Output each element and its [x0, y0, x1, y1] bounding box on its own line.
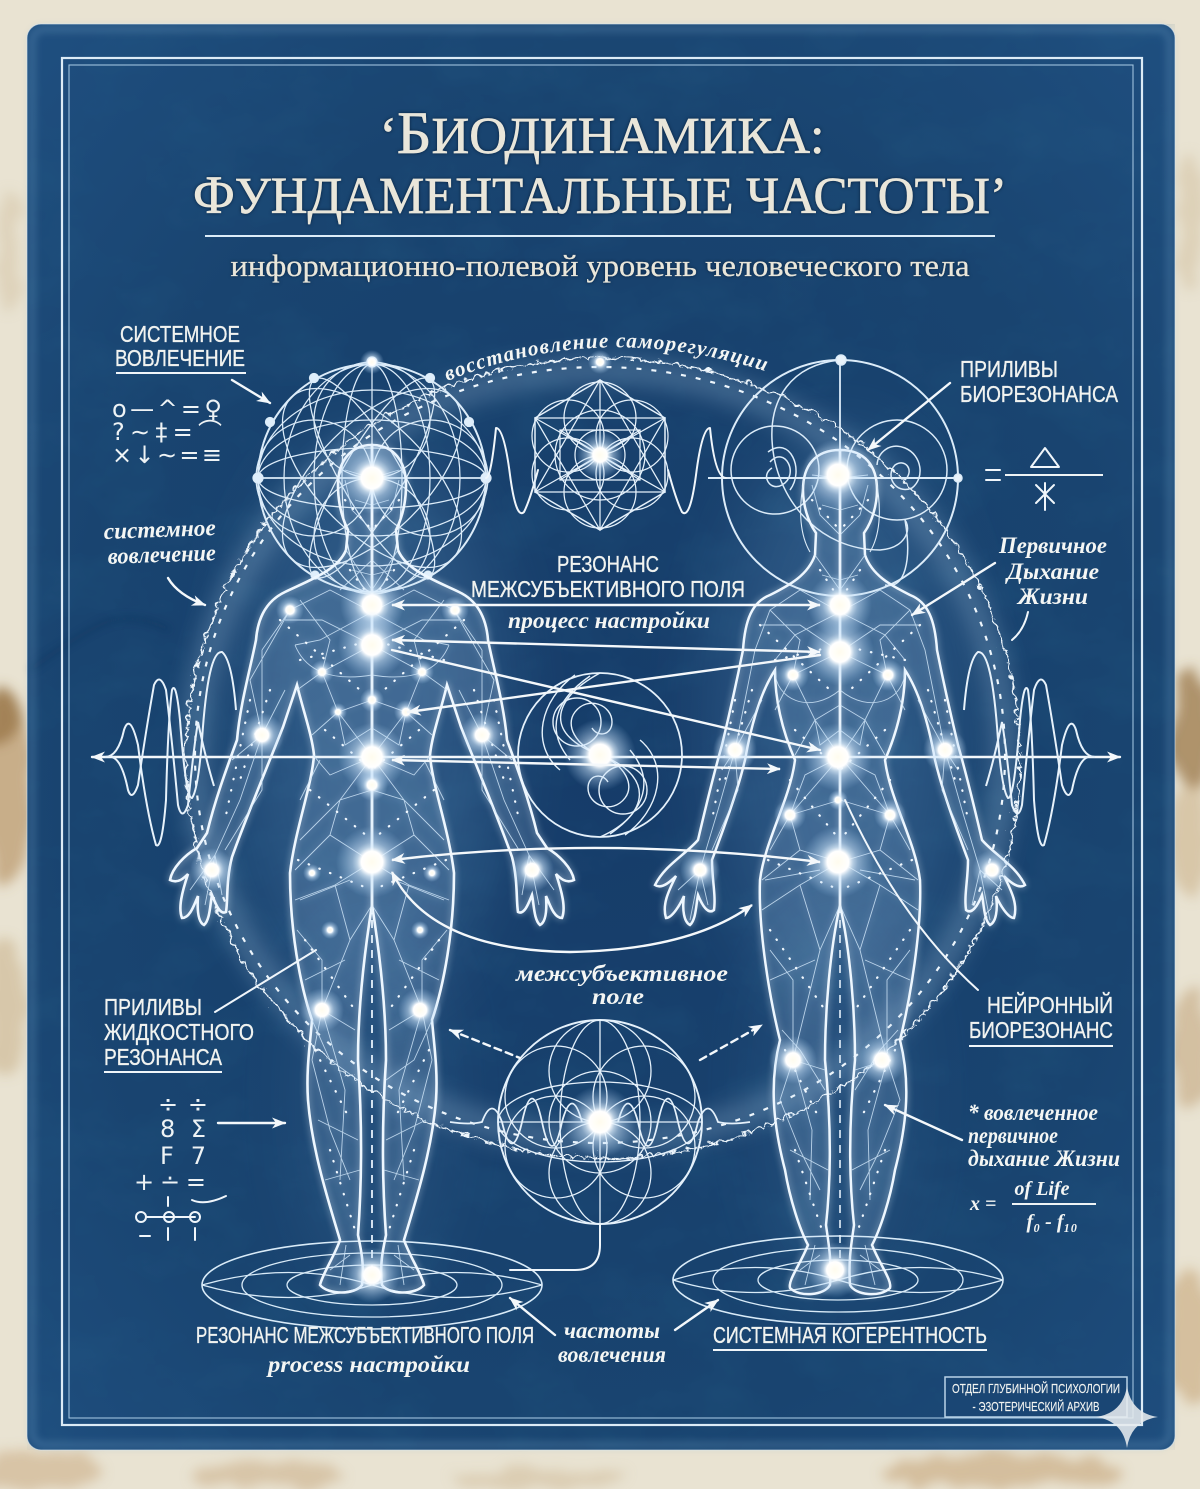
- central horizontal axis with wave packets: [92, 652, 1120, 845]
- handwritten: system involvement: [103, 515, 216, 569]
- male figure: [170, 445, 574, 1292]
- arrow to left sphere: [232, 380, 270, 403]
- subtitle: информационно-полевой уровень человеческого тела: [230, 248, 970, 283]
- symbols lower-left: [134, 1090, 226, 1240]
- bottom flower of life: [450, 1020, 750, 1224]
- label: tides of bioresonance: ПРИЛИВЫ: [960, 356, 1058, 382]
- handwritten: involved primary breath of life: [968, 1100, 1120, 1171]
- big field circle: [183, 355, 1017, 1155]
- handwritten: involvement frequencies: [558, 1318, 666, 1367]
- ground discs: [202, 1236, 1003, 1329]
- handwritten: process tuning: process настройки: [266, 1352, 470, 1377]
- label: fluid resonance tides: ПРИЛИВЫ: [104, 994, 202, 1020]
- handwritten: intersubjective field: поле: [592, 984, 644, 1009]
- label: neural bioresonance: [969, 991, 1113, 1046]
- label: fluid resonance tides: РЕЗОНАНСА: [104, 1044, 223, 1070]
- label: bottom-left resonance: РЕЗОНАНС МЕЖСУБЪЕКТИВНОГО ПОЛЯ: [196, 1322, 534, 1348]
- formula lower-right: x =: [969, 1193, 996, 1215]
- title: ФУНДАМЕНТАЛЬНЫЕ ЧАСТОТЫ’: [193, 165, 1007, 225]
- symbols lower-left: ÷ ÷: [158, 1090, 208, 1118]
- label: tides of bioresonance: [960, 356, 1119, 407]
- label: system involvement top-left: СИСТЕМНОЕ: [120, 321, 240, 347]
- arrow to female shoulder: [912, 563, 995, 615]
- symbols top-left: ? ∼ ‡ = ⌒: [112, 418, 222, 446]
- symbols lower-left: + ∸ =: [134, 1168, 206, 1196]
- formula top-right: [986, 448, 1103, 510]
- arrow to male leg: [218, 1122, 285, 1124]
- circular label: restoration of self-regulation: восстановление саморегуляции: [446, 337, 768, 380]
- handwritten: primary breath of life: Дыхание: [1005, 559, 1099, 584]
- symbols top-left: × ↓ ∼ = ≡: [112, 441, 222, 469]
- archive stamp: - ЭЗОТЕРИЧЕСКИЙ АРХИВ: [972, 1399, 1100, 1414]
- label: tides of bioresonance: БИОРЕЗОНАНСА: [960, 381, 1119, 407]
- title: ‘БИОДИНАМИКА:: [380, 100, 824, 166]
- handwritten: tuning process: процесс настройки: [508, 608, 710, 633]
- handwritten: involvement frequencies: частоты: [564, 1318, 660, 1343]
- handwritten: intersubjective field: [515, 961, 728, 1009]
- title rule: [205, 235, 995, 237]
- yin-yang spiral: [518, 673, 682, 837]
- formula lower-right: [969, 1178, 1096, 1233]
- sine wave: top: [486, 428, 726, 513]
- arrow to right sphere: [868, 383, 950, 450]
- sphere: right golden spiral: [708, 355, 962, 596]
- pointer to male thigh: [215, 950, 316, 1012]
- label: intersubjective field resonance: РЕЗОНАНС: [557, 551, 659, 577]
- sparkle mark: [1096, 1386, 1158, 1448]
- arrow to female knee: [885, 1105, 962, 1140]
- handwritten: system involvement: системное: [103, 515, 216, 544]
- handwritten: primary breath of life: Первичное: [998, 533, 1107, 558]
- label: neural bioresonance: БИОРЕЗОНАНС: [969, 1017, 1113, 1043]
- arrow to right disc: [675, 1300, 718, 1330]
- handwritten: intersubjective field: межсубъективное: [515, 961, 728, 986]
- arrow to left disc: [510, 1298, 555, 1335]
- label: system involvement top-left: [115, 321, 246, 373]
- symbols lower-left: F 7: [160, 1142, 206, 1170]
- formula lower-right: of Life: [1015, 1178, 1070, 1200]
- resonance arrows between figures: [392, 605, 820, 1270]
- handwritten: involved primary breath of life: дыхание Жизни: [968, 1146, 1120, 1171]
- symbols top-left: o — ^ = ♀: [112, 395, 222, 423]
- handwritten: involvement frequencies: вовлечения: [558, 1342, 666, 1367]
- label: neural bioresonance: НЕЙРОННЫЙ: [987, 991, 1113, 1018]
- label: fluid resonance tides: ЖИДКОСТНОГО: [104, 1019, 254, 1045]
- label: system involvement top-left: ВОВЛЕЧЕНИЕ: [115, 345, 245, 371]
- symbols top-left: [112, 395, 222, 469]
- metatron cube: [532, 380, 668, 530]
- label: intersubjective field resonance: [471, 551, 745, 602]
- handwritten: involved primary breath of life: первичное: [968, 1123, 1058, 1148]
- handwritten: primary breath of life: Жизни: [1016, 584, 1088, 609]
- pointer to female belly: [845, 800, 978, 990]
- title: [193, 100, 1007, 225]
- label: systemic coherence: СИСТЕМНАЯ КОГЕРЕНТНОСТЬ: [713, 1322, 987, 1348]
- label: intersubjective field resonance: МЕЖСУБЪЕКТИВНОГО ПОЛЯ: [471, 576, 745, 602]
- symbols lower-left: 8 Σ: [160, 1115, 206, 1143]
- archive stamp: ОТДЕЛ ГЛУБИННОЙ ПСИХОЛОГИИ: [952, 1381, 1120, 1396]
- label: fluid resonance tides: [104, 994, 254, 1072]
- female figure: [655, 450, 1025, 1294]
- formula lower-right: f₀ - f₁₀: [1027, 1211, 1077, 1233]
- tick to circle: [1012, 612, 1028, 640]
- handwritten: system involvement: вовлечение: [107, 540, 216, 569]
- sphere: left flower: [252, 357, 492, 598]
- energy nodes: [190, 350, 1012, 1303]
- archive stamp: [945, 1377, 1127, 1417]
- handwritten: involved primary breath of life: * вовлеченное: [968, 1100, 1098, 1125]
- arrow to big circle: [168, 578, 205, 605]
- handwritten: primary breath of life: [998, 533, 1107, 609]
- central glow: [242, 440, 958, 1290]
